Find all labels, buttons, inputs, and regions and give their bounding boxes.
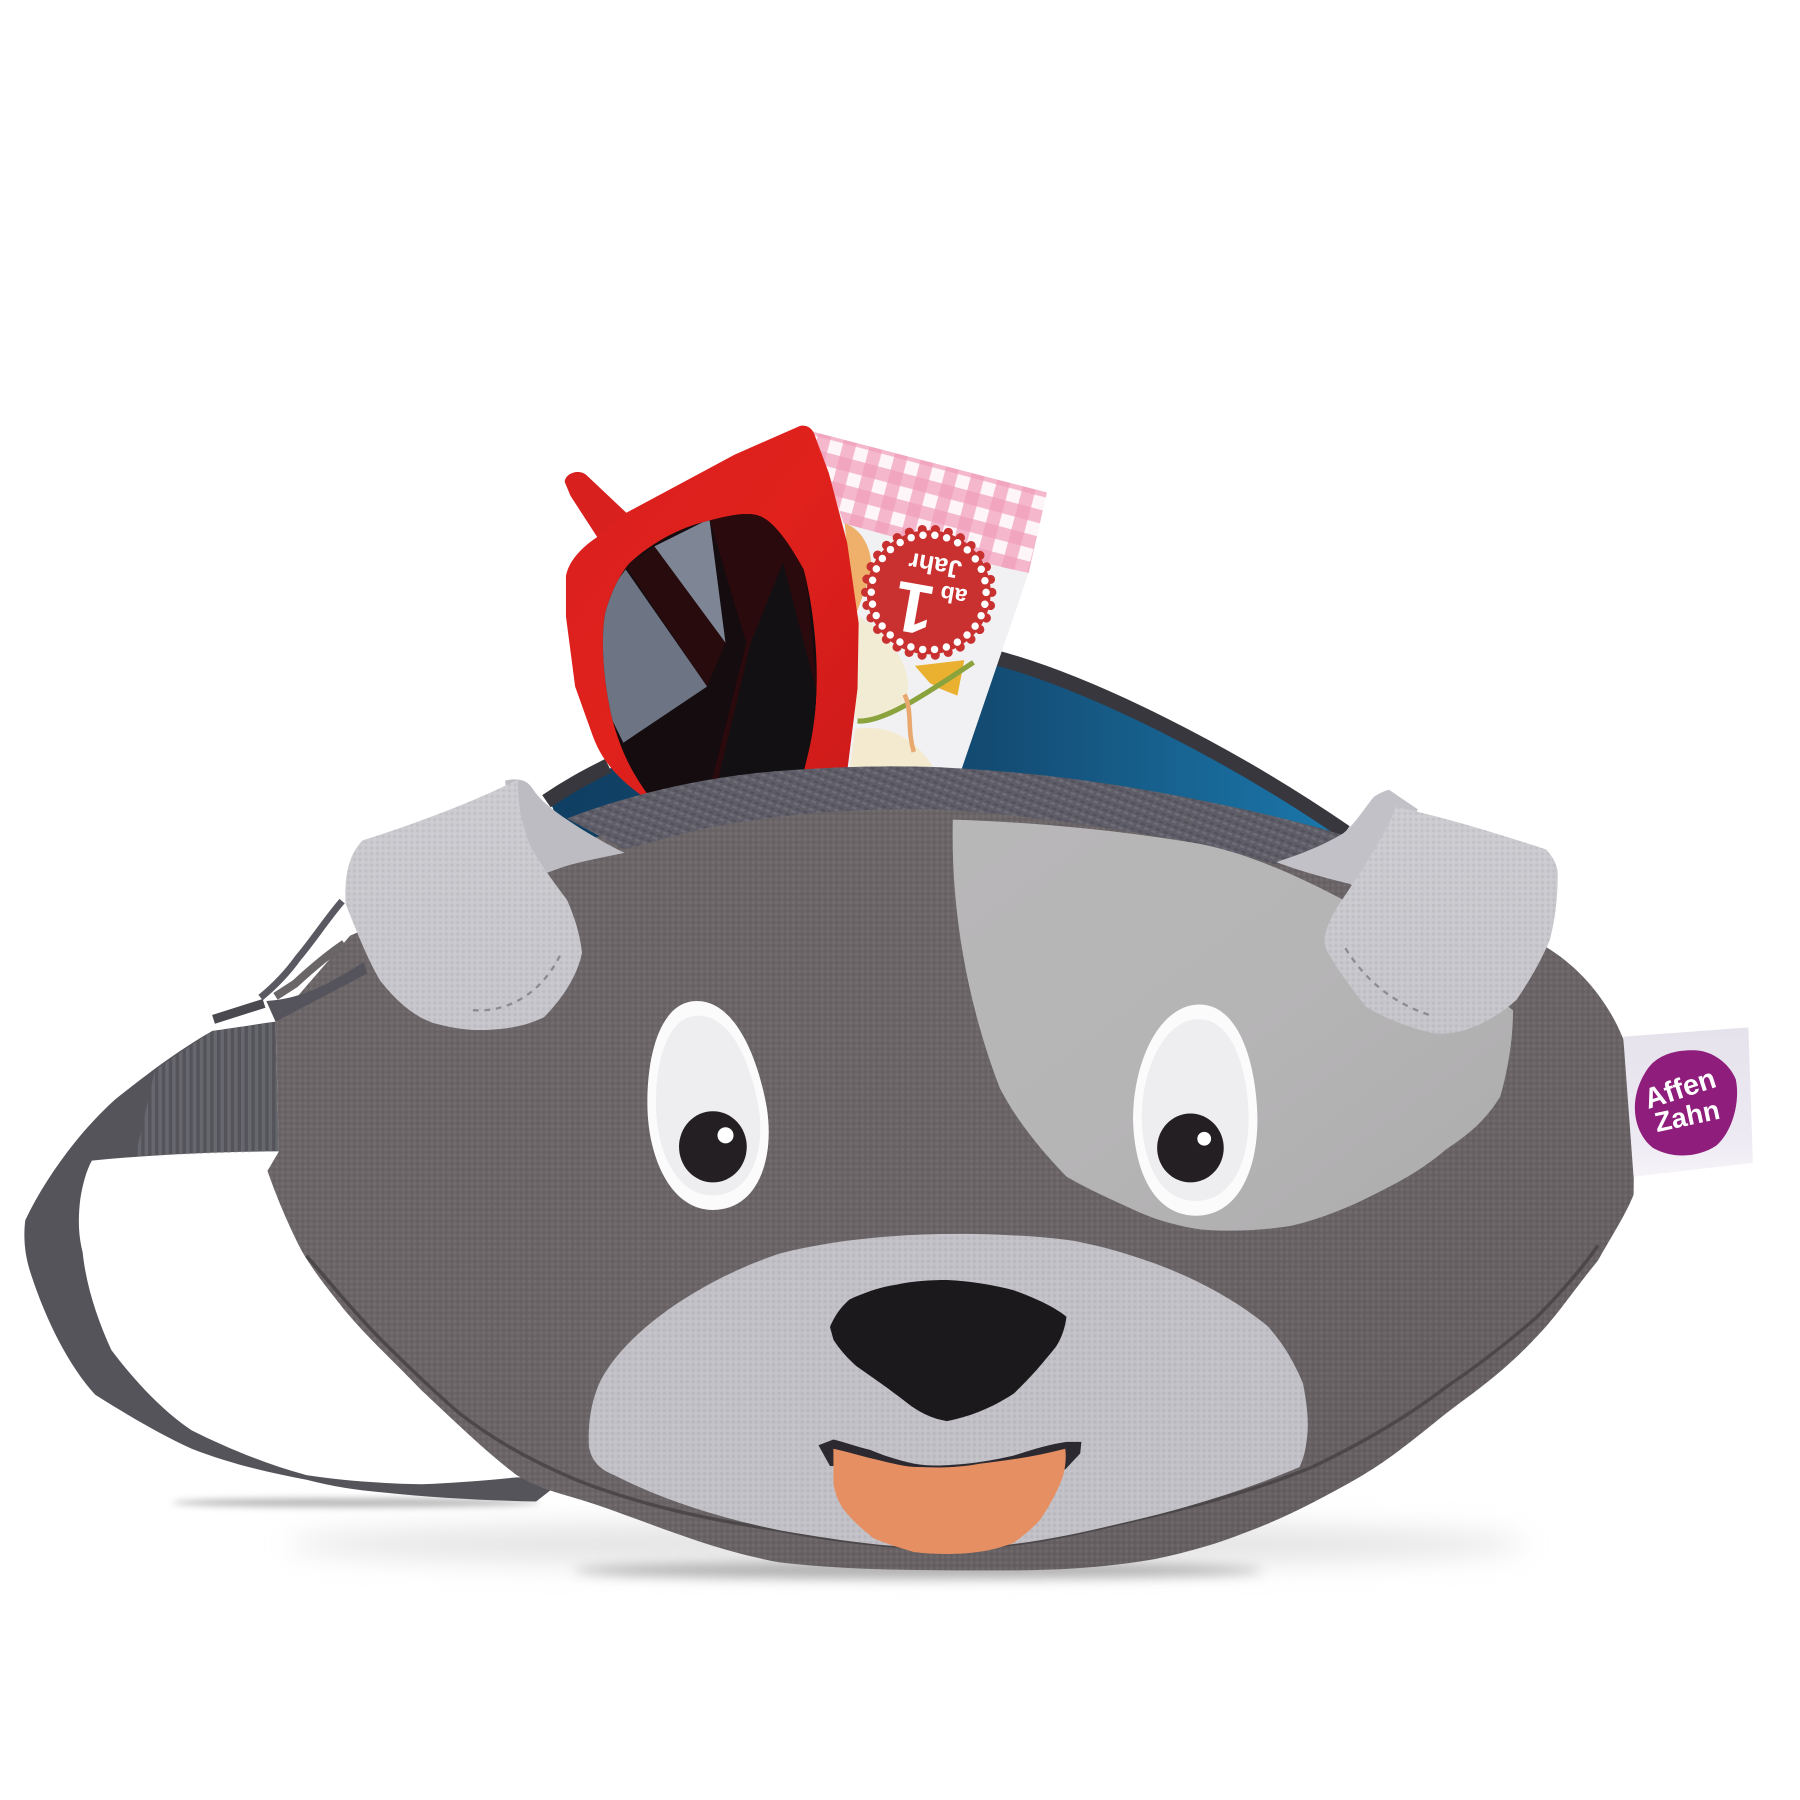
tongue [833, 1449, 1066, 1554]
right ear [1277, 790, 1558, 1034]
red sunglasses [565, 426, 859, 815]
pupil [679, 1111, 747, 1182]
right eye [1133, 1004, 1257, 1216]
age badge: 1 [888, 565, 940, 650]
logo: Zahn [1652, 1094, 1722, 1138]
belt strap [24, 1022, 562, 1502]
front zipper [567, 766, 1345, 864]
frame [566, 426, 859, 801]
age badge [866, 529, 992, 655]
nose [830, 1280, 1066, 1421]
age badge: ab [938, 580, 969, 611]
lens [602, 514, 817, 793]
muzzle [589, 1234, 1308, 1548]
grey eye patch [953, 820, 1513, 1231]
gingham top [813, 432, 1047, 573]
mouth and tongue [818, 1440, 1081, 1554]
logo [1635, 1050, 1737, 1156]
age badge: Jahr [906, 547, 964, 583]
floor shadow [172, 1498, 1527, 1578]
left zipper end and pull [214, 901, 367, 1022]
fruit image [845, 523, 973, 771]
bag back panel and blue lining [546, 654, 1345, 861]
product photo: dog belt bag illustration [24, 426, 1753, 1586]
brand label [1623, 1027, 1753, 1177]
snack pouch [813, 432, 1047, 771]
left eye [647, 1001, 769, 1210]
back zipper [546, 658, 1345, 832]
logo: Affen [1640, 1063, 1720, 1116]
left ear [345, 779, 624, 1030]
bag body [267, 789, 1634, 1570]
bottom seam [307, 1246, 1598, 1548]
pupil [1157, 1114, 1224, 1182]
temple stub [565, 472, 628, 538]
